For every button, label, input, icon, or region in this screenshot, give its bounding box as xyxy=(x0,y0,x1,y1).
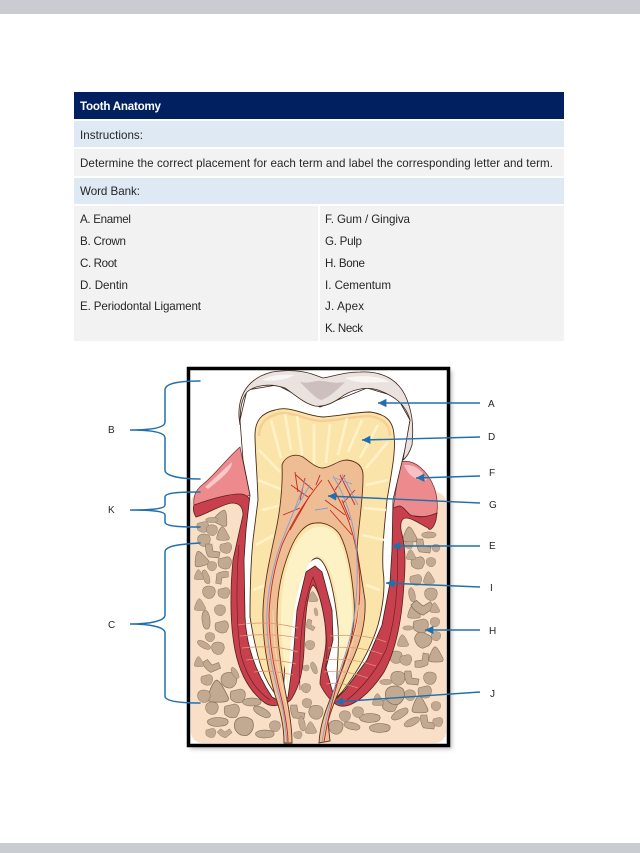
bone pebbles xyxy=(192,508,443,740)
word bank left column: B. Crown xyxy=(80,235,126,248)
label F: F xyxy=(489,468,495,479)
label G: G xyxy=(489,500,497,511)
word bank right column: K. Neck xyxy=(325,322,363,335)
gum right highlight xyxy=(404,465,427,480)
arrow E xyxy=(392,545,480,547)
row: instruction text: Determine the correct placement for each term and label the corresponding letter and term. xyxy=(80,157,553,170)
arrow D xyxy=(362,437,480,440)
heading: Tooth Anatomy xyxy=(74,92,564,119)
label B: B xyxy=(108,425,115,436)
gum left xyxy=(194,447,250,506)
enamel xyxy=(239,371,413,460)
arrow F xyxy=(416,476,480,478)
arrow A xyxy=(378,402,480,404)
ligament fibers xyxy=(237,545,398,700)
label D: D xyxy=(488,432,495,443)
word bank right column: F. Gum / Gingiva xyxy=(325,213,411,226)
gum left highlight xyxy=(205,462,232,489)
bracket B xyxy=(130,381,200,479)
word bank left column: D. Dentin xyxy=(80,279,128,292)
bracket K xyxy=(130,492,200,527)
word bank right column: I. Cementum xyxy=(325,279,391,292)
row: Instructions: Instructions: xyxy=(80,129,143,142)
label C: C xyxy=(108,620,115,631)
periodontal fibers xyxy=(238,623,386,688)
inner dentin under pulp xyxy=(281,527,352,690)
frame xyxy=(188,368,448,746)
word bank right column: H. Bone xyxy=(325,257,365,270)
bracket C xyxy=(130,543,200,703)
enamel highlight xyxy=(262,375,390,383)
label A: A xyxy=(488,399,495,410)
arrow I xyxy=(386,583,480,587)
periodontal ligament xyxy=(193,494,437,706)
word bank left column: C. Root xyxy=(80,257,118,270)
arrow G xyxy=(328,496,480,503)
bone background xyxy=(191,492,446,743)
row: instruction text xyxy=(74,149,564,176)
word bank left column: E. Periodontal Ligament xyxy=(80,300,202,313)
row: Word Bank: Word Bank: xyxy=(80,185,140,198)
row: Instructions xyxy=(74,121,564,147)
word bank right column: G. Pulp xyxy=(325,235,362,248)
word bank right column xyxy=(320,206,564,341)
pulp chamber and root canals xyxy=(263,455,365,743)
dentin tubules xyxy=(253,414,388,590)
word bank right column: J. Apex xyxy=(325,300,364,313)
label H: H xyxy=(489,626,496,637)
row: Word Bank xyxy=(74,178,564,204)
word bank left column xyxy=(74,206,318,341)
heading: Tooth Anatomy: Tooth Anatomy xyxy=(80,100,162,113)
top page band xyxy=(0,0,640,14)
enamel shading xyxy=(300,381,345,400)
gum right xyxy=(393,461,437,518)
blood vessels and nerves xyxy=(267,472,360,742)
panel: tooth diagram xyxy=(188,368,452,749)
dentin xyxy=(250,409,395,697)
arrow J xyxy=(335,692,480,702)
label E: E xyxy=(489,541,496,552)
panel: worksheet table xyxy=(74,92,564,341)
dentin inner glow xyxy=(259,413,390,436)
label J: J xyxy=(490,689,495,700)
label K: K xyxy=(108,505,115,516)
root: cementum xyxy=(240,385,410,703)
arrow H xyxy=(425,629,480,631)
label I: I xyxy=(490,583,493,594)
word bank left column: A. Enamel xyxy=(80,213,131,226)
bottom page band xyxy=(0,843,640,853)
